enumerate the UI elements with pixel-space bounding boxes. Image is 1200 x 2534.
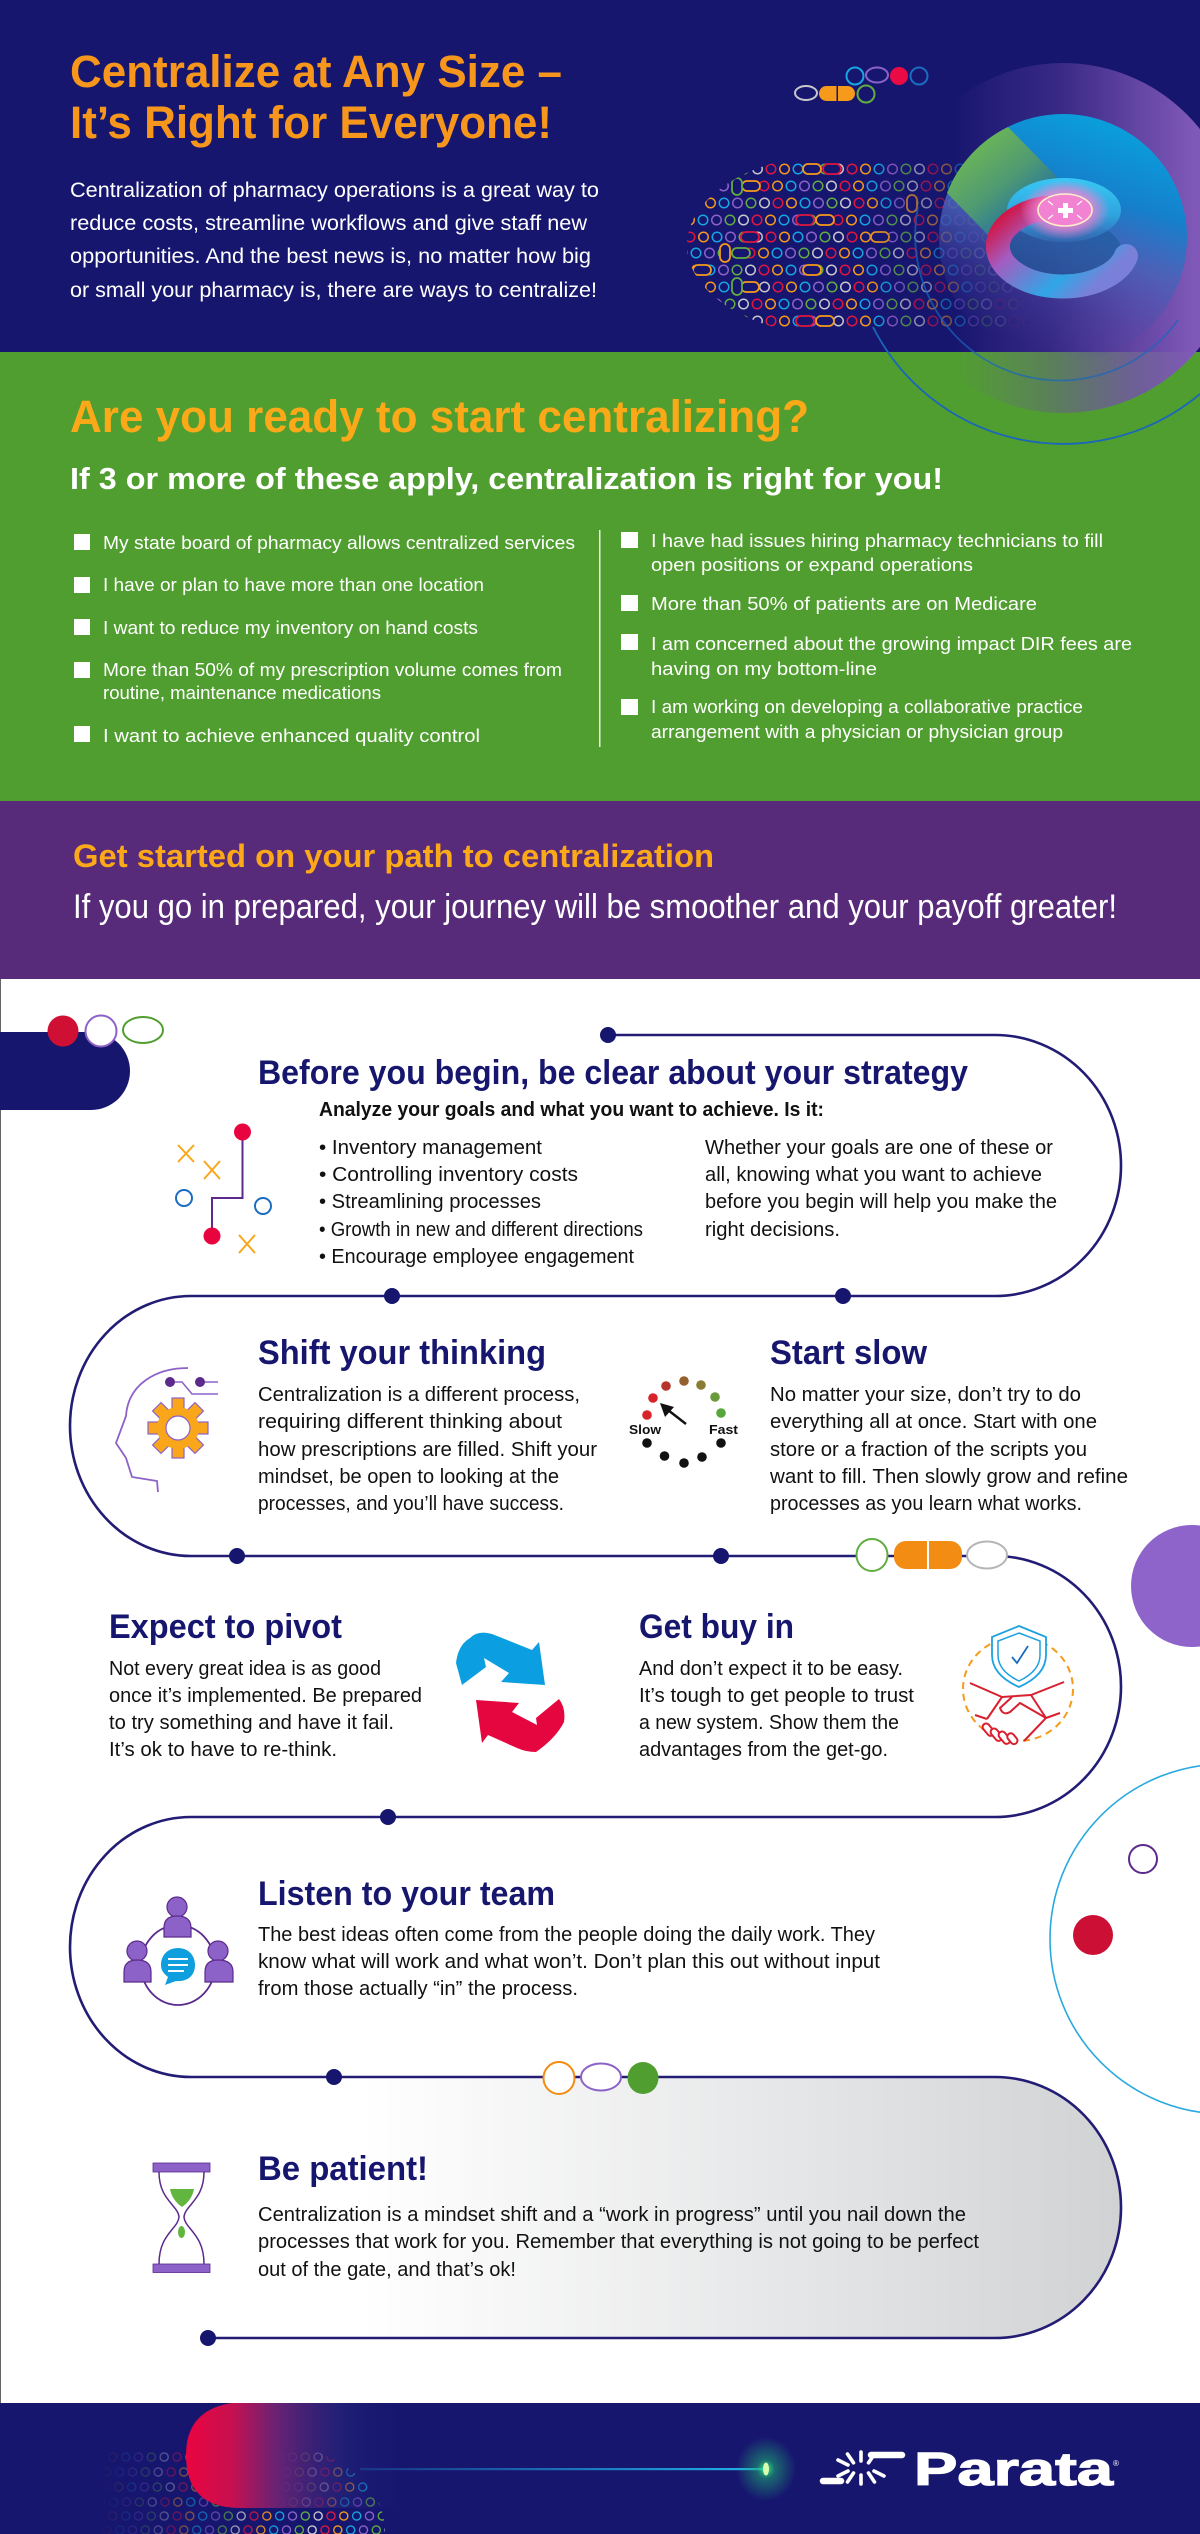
heading: Shift your thinking	[258, 1334, 546, 1372]
heading: Get buy in	[639, 1608, 794, 1646]
light beam with glow	[360, 2437, 796, 2501]
panel: header	[0, 0, 1200, 352]
title: Centralize at Any Size –	[70, 46, 562, 97]
body text: to try something and have it fail.	[109, 1712, 394, 1734]
logo: Parata	[823, 2443, 1119, 2495]
step: be patient	[153, 2150, 979, 2281]
body text	[258, 1384, 597, 1515]
thin orbit arcs	[873, 207, 1200, 444]
step: listen to your team	[124, 1875, 880, 2005]
pill matrix	[669, 164, 1040, 326]
footer red capsule	[186, 2403, 410, 2508]
checklist left column: I want to achieve enhanced quality control	[103, 725, 480, 746]
body text: The best ideas often come from the people doing the daily work. They	[258, 1924, 875, 1946]
step: start slow	[629, 1334, 1128, 1515]
body text	[705, 1137, 1057, 1241]
icon: strategy play	[176, 1124, 271, 1253]
header artwork: pills and central hub	[669, 63, 1200, 444]
heading: Listen to your team	[258, 1875, 555, 1913]
checklist left column	[74, 532, 575, 746]
icon: team circle	[124, 1897, 233, 2005]
decoration: right purple disc	[1131, 1525, 1200, 1647]
checklist left column: My state board of pharmacy allows centralized services	[103, 532, 575, 553]
intro text: reduce costs, streamline workflows and give staff new	[70, 212, 588, 235]
body text: a new system. Show them the	[639, 1712, 899, 1734]
bullet list	[319, 1137, 643, 1268]
body text: once it’s implemented. Be prepared	[109, 1685, 422, 1707]
body text: all, knowing what you want to achieve	[705, 1164, 1042, 1186]
body text	[258, 1924, 880, 2000]
registered mark: ®	[1113, 2459, 1119, 2468]
body text: Not every great idea is as good	[109, 1658, 381, 1680]
decoration: cyan ring with dots	[1050, 1764, 1200, 2114]
bullet list: • Growth in new and different directions	[319, 1219, 643, 1241]
footer pill matrix	[88, 2457, 400, 2530]
intro text: or small your pharmacy is, there are ways to centralize!	[70, 279, 597, 302]
subheading: If 3 or more of these apply, centralization is right for you!	[70, 461, 943, 496]
icon: shield and handshake	[963, 1626, 1073, 1746]
intro text: Centralization of pharmacy operations is a great way to	[70, 179, 599, 202]
body text: Whether your goals are one of these or	[705, 1137, 1053, 1159]
step: shift your thinking	[116, 1334, 597, 1515]
checklist left column: routine, maintenance medications	[103, 682, 381, 703]
body text: want to fill. Then slowly grow and refine	[769, 1466, 1128, 1488]
icon: speed dial: Slow	[629, 1422, 662, 1437]
body text: Centralization is a different process,	[258, 1384, 580, 1406]
checklist right column	[621, 530, 1132, 742]
checklist left column: More than 50% of my prescription volume comes from	[103, 659, 562, 680]
body text: out of the gate, and that’s ok!	[258, 2259, 516, 2281]
body text: store or a fraction of the scripts you	[770, 1439, 1087, 1461]
bullet list: • Encourage employee engagement	[319, 1246, 634, 1268]
body text	[769, 1384, 1128, 1515]
heading: Start slow	[770, 1334, 928, 1372]
body text: know what will work and what won’t. Don’t plan this out without input	[258, 1951, 880, 1973]
title	[70, 46, 562, 148]
body text	[639, 1658, 914, 1761]
icon: head with gear	[116, 1368, 218, 1492]
body text: advantages from the get-go.	[639, 1739, 888, 1761]
lead-in: Analyze your goals and what you want to achieve. Is it:	[319, 1099, 824, 1121]
heading: are you ready: Are you ready to start centralizing?	[70, 391, 809, 442]
pill cluster on path: orange, purple, green	[544, 2062, 658, 2094]
icon: speed dial: Fast	[709, 1422, 739, 1437]
body text: And don’t expect it to be easy.	[639, 1658, 903, 1680]
bullet list: • Controlling inventory costs	[319, 1164, 578, 1186]
step: get buy in	[639, 1608, 1073, 1761]
heading: Expect to pivot	[109, 1608, 342, 1646]
logo wordmark: Parata	[914, 2443, 1114, 2495]
path dots	[200, 1027, 851, 2346]
panel: get started banner	[0, 801, 1200, 979]
body text: right decisions.	[705, 1219, 840, 1241]
checklist right column: I have had issues hiring pharmacy technicians to fill	[651, 530, 1103, 551]
body text: mindset, be open to looking at the	[258, 1466, 559, 1488]
banner heading: Get started on your path to centralization	[73, 838, 714, 874]
panel: journey path	[0, 979, 1200, 2403]
body text: processes as you learn what works.	[770, 1493, 1082, 1515]
checklist left column: I have or plan to have more than one location	[103, 574, 484, 595]
decoration: top-left capsule	[0, 1016, 163, 1110]
title: It’s Right for Everyone!	[70, 97, 552, 148]
body text: It’s tough to get people to trust	[639, 1685, 914, 1707]
body text: everything all at once. Start with one	[770, 1411, 1097, 1433]
checklist right column: open positions or expand operations	[651, 554, 973, 575]
icon: speed dial	[629, 1376, 739, 1468]
body text	[109, 1658, 422, 1761]
heading: Before you begin, be clear about your strategy	[258, 1054, 968, 1092]
checklist right column: I am concerned about the growing impact DIR fees are	[651, 633, 1132, 654]
hub disc	[939, 114, 1187, 362]
body text: processes that work for you. Remember that everything is not going to be perfect	[258, 2231, 979, 2253]
bullet list: • Streamlining processes	[319, 1191, 541, 1213]
checklist right column: having on my bottom-line	[651, 658, 877, 679]
body text: before you begin will help you make the	[705, 1191, 1057, 1213]
step: expect to pivot	[109, 1608, 564, 1761]
checklist left column: I want to reduce my inventory on hand costs	[103, 617, 478, 638]
icon: pivot arrows	[456, 1633, 564, 1752]
intro text: opportunities. And the best news is, no matter how big	[70, 245, 591, 268]
checklist right column: I am working on developing a collaborative practice	[651, 696, 1083, 717]
logo mark	[823, 2452, 902, 2484]
body text: requiring different thinking about	[258, 1411, 562, 1433]
body text: No matter your size, don’t try to do	[770, 1384, 1081, 1406]
body text	[258, 2204, 979, 2281]
checklist right column: arrangement with a physician or physician group	[651, 721, 1063, 742]
winding path line	[70, 1035, 1121, 2338]
step: before you begin	[176, 1054, 1057, 1268]
checklist right column: More than 50% of patients are on Medicare	[651, 593, 1037, 614]
pill cluster on path: green, orange, gray	[856, 1539, 1007, 1571]
body text: Centralization is a mindset shift and a “work in progress” until you nail down the	[258, 2204, 966, 2226]
bullet list: • Inventory management	[319, 1137, 542, 1159]
panel: footer	[0, 2403, 1200, 2534]
body text: processes, and you’ll have success.	[258, 1493, 564, 1515]
panel: readiness checklist	[0, 352, 1200, 801]
body text: It’s ok to have to re-think.	[109, 1739, 337, 1761]
body text: how prescriptions are filled. Shift your	[258, 1439, 597, 1461]
small pill cluster	[795, 68, 928, 102]
banner text: If you go in prepared, your journey will be smoother and your payoff greater!	[73, 888, 1117, 926]
intro text	[70, 179, 599, 302]
heading: Be patient!	[258, 2150, 428, 2188]
gray fill of last step	[360, 2077, 1121, 2338]
icon: hourglass	[153, 2163, 210, 2272]
body text: from those actually “in” the process.	[258, 1978, 578, 2000]
